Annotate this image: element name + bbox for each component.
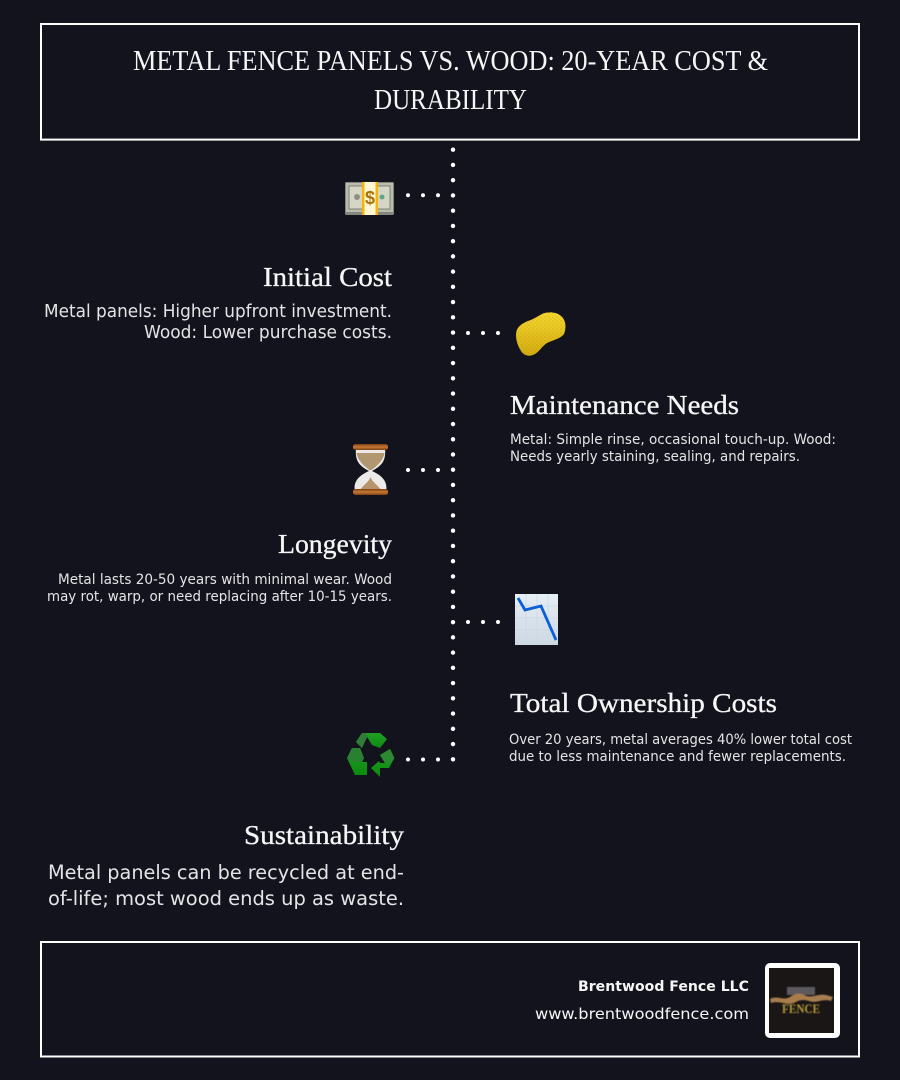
panel: maintenance needs xyxy=(510,390,836,465)
text: initial cost details: Metal panels: Higher upfront investment. xyxy=(44,302,392,322)
heading: longevity: Longevity xyxy=(278,529,393,559)
text: initial cost details xyxy=(44,302,392,343)
text: maintenance details: Metal: Simple rinse, occasional touch-up. Wood: xyxy=(510,432,836,448)
text: maintenance details: Needs yearly staining, sealing, and repairs. xyxy=(510,449,800,465)
icon: banknotes xyxy=(345,182,394,215)
dotted timeline spine xyxy=(451,150,455,760)
text: longevity details: may rot, warp, or need replacing after 10-15 years. xyxy=(47,589,392,605)
text: sustainability details: of-life; most wood ends up as waste. xyxy=(48,887,404,910)
panel: initial cost xyxy=(44,262,393,343)
text: maintenance details xyxy=(510,432,836,465)
connector: total cost xyxy=(468,620,500,624)
logo: FENCE xyxy=(782,1001,820,1016)
text: longevity details: Metal lasts 20-50 years with minimal wear. Wood xyxy=(58,572,392,588)
connector: sustainability xyxy=(408,758,440,762)
panel: total ownership costs xyxy=(509,688,852,765)
text: total cost details: due to less maintenance and fewer replacements. xyxy=(509,749,846,765)
footer panel xyxy=(41,942,859,1056)
title banner: DURABILITY xyxy=(374,85,527,116)
company name: Brentwood Fence LLC xyxy=(578,979,749,995)
logo xyxy=(765,963,840,1038)
connector: longevity xyxy=(408,468,440,472)
icon: recycling symbol xyxy=(347,733,394,777)
text: sustainability details: Metal panels can be recycled at end- xyxy=(48,861,404,884)
icon: banknotes: $ xyxy=(365,188,375,208)
icon: hourglass xyxy=(353,444,388,495)
text: initial cost details: Wood: Lower purchase costs. xyxy=(144,323,392,343)
website: www.brentwoodfence.com xyxy=(535,1005,749,1023)
text: total cost details: Over 20 years, metal averages 40% lower total cost xyxy=(509,732,852,748)
title banner: METAL FENCE PANELS VS. WOOD: 20-YEAR COST & xyxy=(133,46,768,77)
text: total cost details xyxy=(509,732,852,765)
heading: maintenance needs: Maintenance Needs xyxy=(510,390,739,420)
panel: sustainability xyxy=(48,820,405,910)
text: longevity details xyxy=(47,572,392,605)
icon: sponge xyxy=(516,312,565,356)
title banner xyxy=(41,24,859,140)
heading: initial cost: Initial Cost xyxy=(263,262,393,292)
connector: maintenance xyxy=(468,331,500,335)
panel: longevity xyxy=(47,529,393,605)
heading: sustainability: Sustainability xyxy=(244,820,405,850)
icon: declining chart xyxy=(515,594,558,645)
heading: total ownership costs: Total Ownership Costs xyxy=(510,688,777,718)
connector: initial cost xyxy=(408,193,440,197)
text: sustainability details xyxy=(48,861,404,910)
